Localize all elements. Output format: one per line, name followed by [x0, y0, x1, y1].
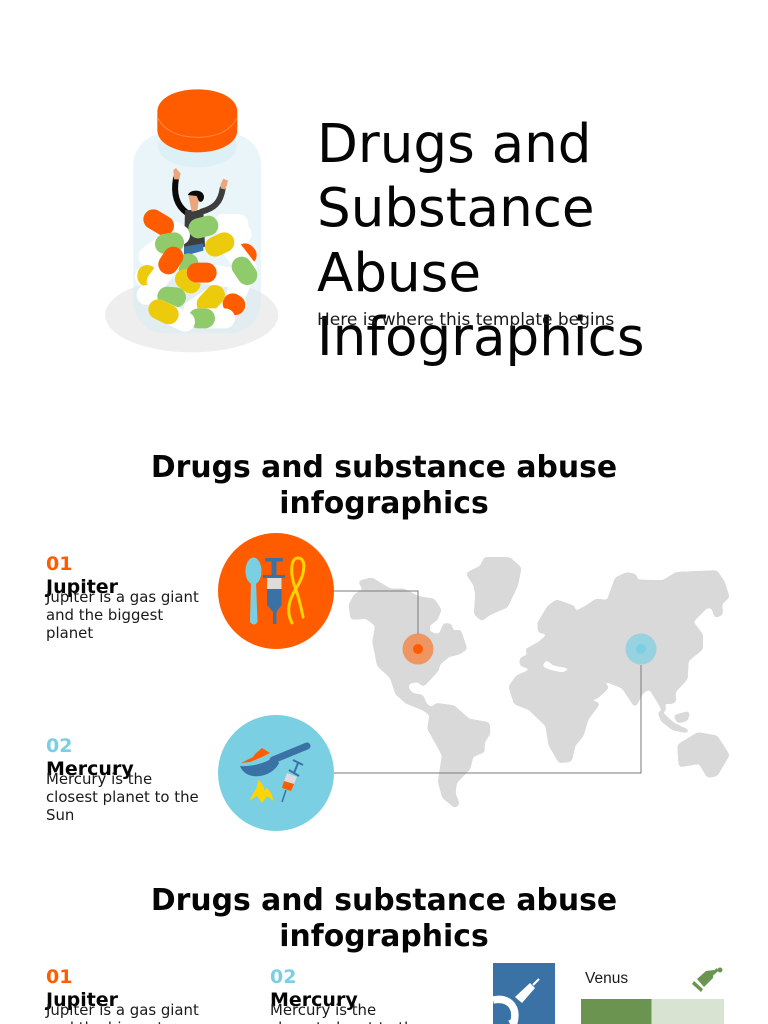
item 01 text: and the biggest: [46, 606, 163, 624]
Venus label: Venus: [585, 970, 628, 987]
bottom item 01 title: Jupiter: [46, 989, 118, 1011]
section heading 2: Drugs and substance abuse: [151, 883, 617, 918]
item 02 title: Mercury: [46, 758, 134, 780]
bottom item 01 text: Jupiter is a gas giant: [46, 1001, 199, 1019]
section heading 1: [151, 450, 617, 521]
world map: [351, 559, 727, 806]
subtitle: Here is where this template begins: [317, 310, 614, 330]
connector: Jupiter to North America: [334, 591, 418, 634]
section heading 2: infographics: [279, 919, 489, 954]
icon: blue circle with spoon, flame and syringe: [218, 715, 334, 831]
bottom item 02 number: 02: [270, 966, 296, 988]
item 02 text: [46, 770, 199, 824]
bottom item 02 text: [270, 1001, 423, 1024]
section heading 2: [151, 883, 617, 954]
section heading 1: Drugs and substance abuse: [151, 450, 617, 485]
item 02 number: 02: [46, 735, 72, 757]
bottom item 02 title: Mercury: [270, 989, 358, 1011]
map pin: orange: [402, 634, 434, 664]
title: Infographics: [317, 306, 645, 368]
title: Drugs and: [317, 113, 592, 175]
item 01 text: [45, 588, 199, 642]
icon: blue square with syringe: [493, 963, 555, 1024]
connector: Mercury to Asia: [334, 665, 641, 773]
bottom item 02 text: Mercury is the: [270, 1001, 376, 1019]
item 02 text: Sun: [46, 806, 74, 824]
bottom item 01 number: 01: [46, 966, 72, 988]
section heading 1: infographics: [279, 486, 489, 521]
item 01 text: Jupiter is a gas giant: [46, 588, 199, 606]
title: Substance: [317, 177, 595, 239]
icon: green syringe: [692, 968, 722, 992]
item 01 number: 01: [46, 553, 72, 575]
illustration: pill bottle with person: [105, 89, 278, 352]
title: Abuse: [317, 242, 481, 304]
item 02 text: Mercury is the: [46, 770, 152, 788]
item 02 text: closest planet to the: [46, 788, 199, 806]
item 01 title: Jupiter: [46, 576, 118, 598]
map pin: blue: [626, 634, 656, 664]
bar: Venus: [581, 999, 724, 1024]
icon: orange circle with spoon, syringe and tourniquet: [218, 533, 334, 649]
title: [317, 113, 645, 368]
item 01 text: planet: [46, 624, 93, 642]
